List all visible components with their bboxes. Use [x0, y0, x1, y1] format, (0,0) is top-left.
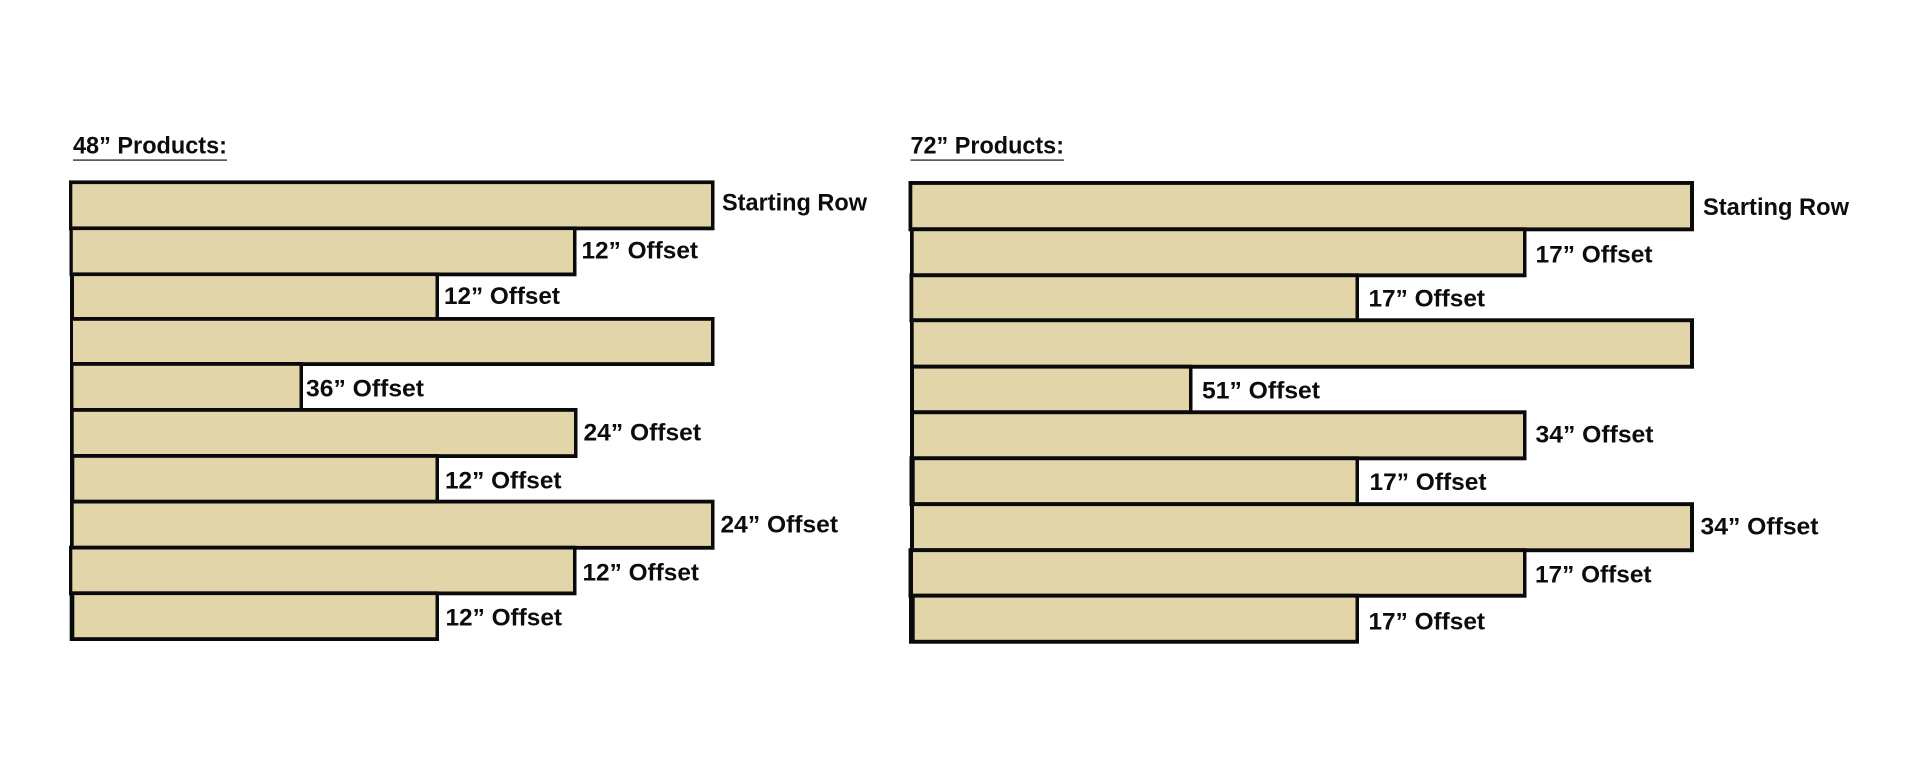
plank row 10 [909, 594, 1359, 644]
label: row 10 offset: 17” Offset [1368, 608, 1485, 635]
label: row 9 offset: 17” Offset [1535, 562, 1652, 589]
plank row 10 [70, 591, 439, 641]
plank row 1 [908, 181, 1694, 231]
label: row 7 offset: 17” Offset [1370, 469, 1487, 496]
label: starting row: Starting Row [1703, 194, 1849, 221]
plank row 8 [910, 502, 1694, 552]
label: row 9 offset: 12” Offset [582, 559, 699, 586]
plank row 3 [70, 272, 439, 321]
label: row 3 offset: 12” Offset [444, 283, 560, 310]
label: row 5 offset: 51” Offset [1202, 378, 1320, 405]
plank row 6 [910, 410, 1526, 460]
label: row 3 offset: 17” Offset [1368, 286, 1485, 313]
plank row 4 [70, 317, 714, 366]
plank row 5 [70, 362, 303, 412]
label: row 10 offset: 12” Offset [446, 605, 562, 632]
label: row 7 offset: 12” Offset [445, 467, 562, 494]
plank row 2 [70, 226, 576, 276]
plank row 3 [910, 273, 1359, 322]
heading: 72 inch products: 72” Products: [910, 133, 1064, 160]
label: row 2 offset: 17” Offset [1536, 242, 1653, 269]
label: row 2 offset: 12” Offset [582, 238, 698, 265]
plank row 1 [69, 180, 714, 230]
plank row 7 [910, 456, 1359, 506]
label: row 8 offset: 34” Offset [1700, 513, 1819, 540]
label: starting row: Starting Row [722, 190, 867, 217]
plank row 4 [910, 318, 1694, 369]
plank row 7 [70, 454, 439, 504]
plank row 8 [70, 500, 714, 550]
plank row 9 [69, 546, 576, 595]
label: row 8 offset: 24” Offset [720, 511, 838, 538]
panel: 48 inch products [69, 133, 867, 641]
plank row 6 [70, 408, 578, 458]
plank row 9 [908, 548, 1526, 598]
plank row 2 [910, 227, 1526, 277]
panel: 72 inch products [908, 133, 1849, 644]
plank row 5 [910, 365, 1192, 414]
label: row 6 offset: 24” Offset [584, 420, 701, 447]
label: row 6 offset: 34” Offset [1536, 422, 1654, 449]
heading: 48 inch products: 48” Products: [73, 133, 227, 160]
label: row 5 offset: 36” Offset [306, 376, 424, 403]
